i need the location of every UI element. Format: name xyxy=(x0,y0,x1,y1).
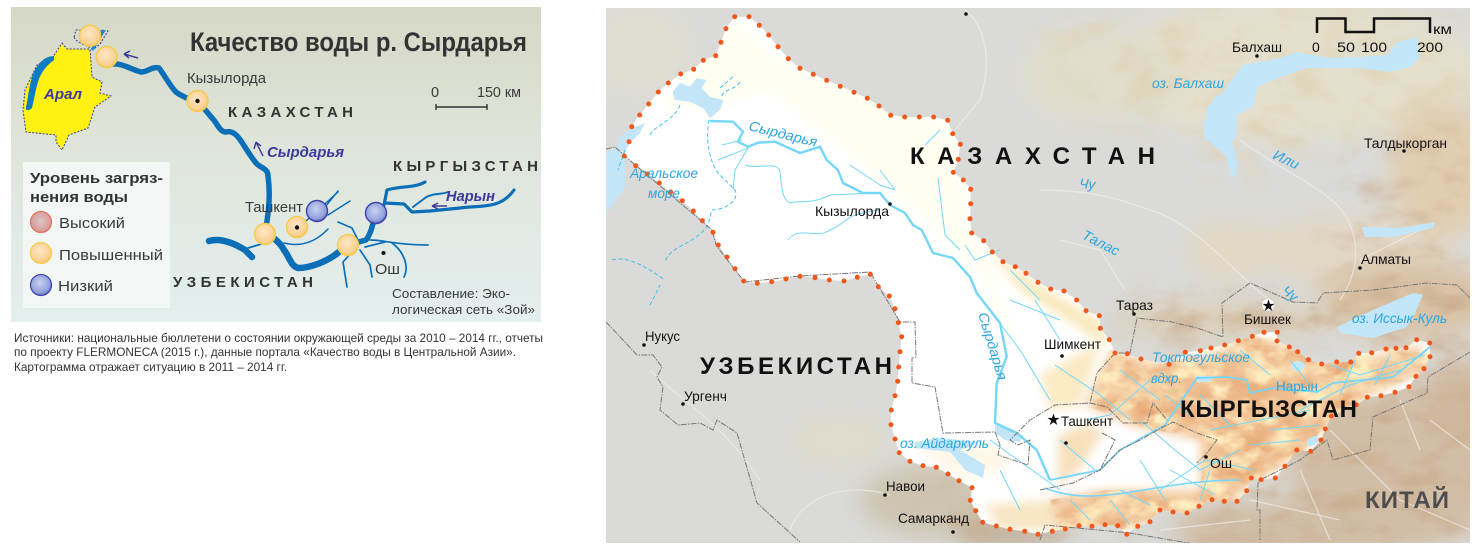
water labels: Токтогульское xyxy=(1152,349,1250,365)
water labels: оз. Айдаркуль xyxy=(900,435,989,451)
scale bar: 150 км xyxy=(477,85,521,101)
water labels: море xyxy=(648,185,680,201)
legend heading line 2: нения воды xyxy=(30,190,128,206)
water labels: Талас xyxy=(1080,226,1123,259)
water labels: оз. Иссык-Куль xyxy=(1352,310,1447,326)
country labels xyxy=(700,143,1449,514)
water labels: Нарын xyxy=(1276,378,1318,394)
river: Naryn: Нарын xyxy=(446,188,495,205)
legend: elevated xyxy=(30,242,163,264)
Kazakhstan: КАЗАХСТАН xyxy=(910,143,1155,170)
scale bar xyxy=(431,85,521,110)
map labels xyxy=(173,27,538,317)
legend heading: Уровень загряз- xyxy=(30,171,163,187)
Issyk-Kul xyxy=(1337,293,1423,338)
legend: high xyxy=(30,212,125,232)
legend: elevated: Повышенный xyxy=(59,248,163,264)
Small Aral xyxy=(673,78,723,118)
Kapchagay xyxy=(1362,222,1435,237)
Kyrgyz relief texture xyxy=(1050,335,1430,535)
river: Syr Darya: Сырдарья xyxy=(267,144,344,161)
capital star: Tashkent: ★ xyxy=(1047,412,1060,427)
city labels: Кызылорда xyxy=(815,203,889,219)
city: Osh: Ош xyxy=(375,262,400,278)
relief texture xyxy=(1030,8,1470,180)
Chardara xyxy=(995,425,1023,442)
sources note: Картограмма отражает ситуацию в 2011 – 2014 гг. xyxy=(14,361,287,374)
Kyrgyzstan: КЫРГЫЗСТАН xyxy=(1180,396,1357,423)
water labels: Сырдарья xyxy=(747,117,820,150)
city labels: Ташкент xyxy=(1061,413,1114,429)
legend: low xyxy=(30,274,113,296)
water labels: Чу xyxy=(1279,282,1302,305)
relief tints outside basin xyxy=(650,8,1470,543)
water labels: Аральское xyxy=(629,165,698,181)
lakes xyxy=(606,37,1435,478)
city: Tashkent: Ташкент xyxy=(245,200,303,216)
Aral Sea northwest xyxy=(617,123,645,152)
city markers xyxy=(642,12,1406,534)
water labels xyxy=(629,75,1447,451)
city labels: Бишкек xyxy=(1244,311,1292,327)
Toktogul xyxy=(1195,376,1213,382)
panel: relief map xyxy=(590,0,1480,550)
city labels: Нукус xyxy=(645,328,680,344)
city labels: Ош xyxy=(1210,455,1232,471)
Aral basin region xyxy=(23,30,111,150)
arrow: Naryn flow xyxy=(432,203,447,209)
map scale bar xyxy=(1312,18,1452,55)
Aydarkul xyxy=(915,438,985,478)
city labels: Балхаш xyxy=(1232,39,1282,55)
water labels: Чу xyxy=(1079,175,1097,192)
river basin area xyxy=(606,8,1470,543)
map base xyxy=(606,8,1470,543)
water labels: Сырдарья xyxy=(975,310,1011,382)
city labels: Тараз xyxy=(1116,297,1153,313)
state borders xyxy=(606,147,1470,545)
Uzbekistan: УЗБЕКИСТАН xyxy=(700,353,892,380)
map scale bar: 200 xyxy=(1417,39,1443,55)
arrow: river flow lower xyxy=(124,51,138,58)
legend: high: Высокий xyxy=(59,216,125,232)
city labels: Навои xyxy=(886,478,925,494)
arrow: Syr Darya flow xyxy=(254,142,263,156)
faint rivers xyxy=(650,10,1470,540)
water labels: оз. Балхаш xyxy=(1152,75,1224,91)
city labels: Шимкент xyxy=(1044,336,1102,352)
Chatyr-Kul xyxy=(1306,436,1320,446)
water labels: Или xyxy=(1271,146,1302,172)
label: Aral: Арал xyxy=(43,86,83,103)
map scale bar: 100 xyxy=(1361,39,1387,55)
panel background xyxy=(11,7,541,322)
country: Uzbekistan: УЗБЕКИСТАН xyxy=(173,274,313,291)
city labels: Ургенч xyxy=(684,388,727,404)
city: Kyzylorda: Кызылорда xyxy=(187,71,267,87)
scale bar: 0 xyxy=(431,85,439,101)
city labels: Талдыкорган xyxy=(1364,135,1447,151)
country: Kyrgyzstan: КЫРГЫЗСТАН xyxy=(393,158,538,175)
China: КИТАЙ xyxy=(1365,486,1449,514)
Son-Kul xyxy=(1291,361,1305,371)
Aral Sea west xyxy=(606,147,625,213)
basin boundary dots xyxy=(624,17,1430,534)
dashed dry channels xyxy=(612,75,740,305)
capital star: Bishkek: ★ xyxy=(1262,298,1275,313)
map scale bar: 0 xyxy=(1312,39,1320,55)
legend: low: Низкий xyxy=(58,279,113,295)
title: Качество воды р. Сырдарья xyxy=(190,27,527,57)
Lake Balkhash xyxy=(1203,37,1420,178)
river: Syr Darya main channel xyxy=(710,121,1430,525)
city labels: Алматы xyxy=(1361,251,1411,267)
water labels: вдхр. xyxy=(1151,370,1182,386)
panel: water quality schematic xyxy=(11,7,541,322)
legend: pollution level xyxy=(23,162,170,308)
city labels: Самарканд xyxy=(898,510,969,526)
sources note xyxy=(14,332,543,374)
city labels xyxy=(645,39,1447,526)
sources note: по проекту FLERMONECA (2015 г.), данные портала «Качество воды в Центральной Азии». xyxy=(14,346,516,359)
credit: Составление: Эко- xyxy=(392,286,510,301)
monitoring points xyxy=(80,25,386,256)
map scale bar: км xyxy=(1433,21,1452,37)
map scale bar: 50 xyxy=(1337,39,1355,55)
Syr Darya river network xyxy=(112,64,514,287)
country: Kazakhstan: КАЗАХСТАН xyxy=(228,104,353,121)
credit line 2: логическая сеть «Зой» xyxy=(392,302,535,317)
sources note: Источники: национальные бюллетени о состоянии окружающей среды за 2010 – 2014 гг., отчеты xyxy=(14,332,543,345)
